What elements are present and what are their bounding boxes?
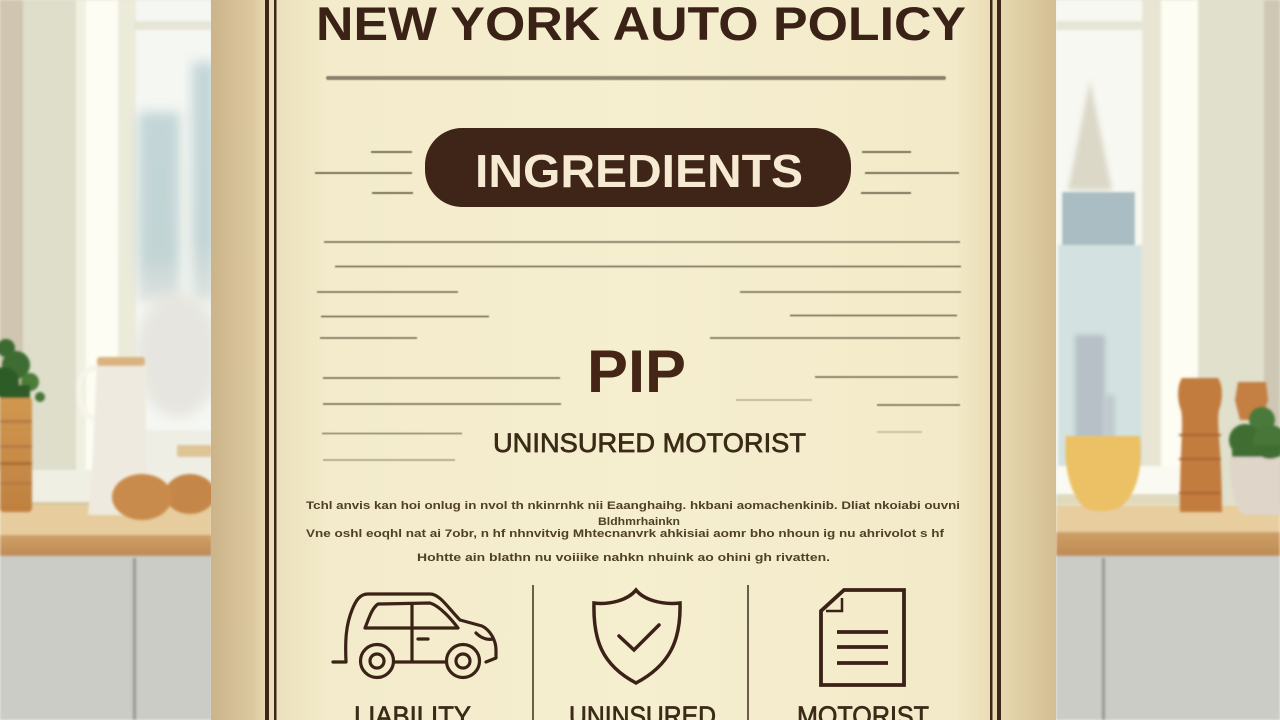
- garbled fine print: Bldhmrhainkn: [598, 516, 680, 528]
- ingredients pill: [425, 128, 851, 207]
- ingredients pill: INGREDIENTS: [475, 145, 803, 197]
- icon: yellow bowl: [1065, 436, 1141, 511]
- title rule: [326, 76, 946, 80]
- kitchen background: right side: [1054, 0, 1280, 720]
- column dividers: [533, 585, 748, 720]
- garbled fine print: [306, 500, 960, 564]
- ruled text lines: [317, 242, 961, 460]
- icon: document: [821, 590, 904, 685]
- icon: potted plant, left: [0, 339, 45, 512]
- poster panel: [211, 0, 1056, 720]
- icon: bread rolls: [112, 474, 215, 520]
- countertops and cabinets: [0, 505, 1280, 720]
- poster double border: [265, 0, 1001, 720]
- garbled fine print: Tchl anvis kan hoi onlug in nvol th nkinrnhk nii Eaanghaihg. hkbani aomachenkinib. Dliat nkoiabi ouvni: [306, 500, 960, 512]
- garbled fine print: Hohtte ain blathn nu voiiike nahkn nhuink ao ohini gh rivatten.: [417, 552, 830, 564]
- icon: white jug: [80, 357, 147, 515]
- pill speed lines: [315, 152, 959, 193]
- PIP heading: PIP: [587, 338, 686, 405]
- icon: wooden pepper mills: [1178, 378, 1268, 512]
- garbled fine print: Vne oshl eoqhl nat ai 7obr, n hf nhnvitvig Mhtecnanvrk ahkisiai aomr bho nhoun ig nu ahrivolot s hf: [306, 528, 944, 540]
- kitchen background: left side: [0, 0, 220, 720]
- icon: shield with check: [594, 590, 680, 683]
- icon: potted plant, right: [1229, 407, 1280, 515]
- icon: car: [333, 594, 496, 678]
- uninsured motorist subheading: UNINSURED MOTORIST: [493, 428, 806, 458]
